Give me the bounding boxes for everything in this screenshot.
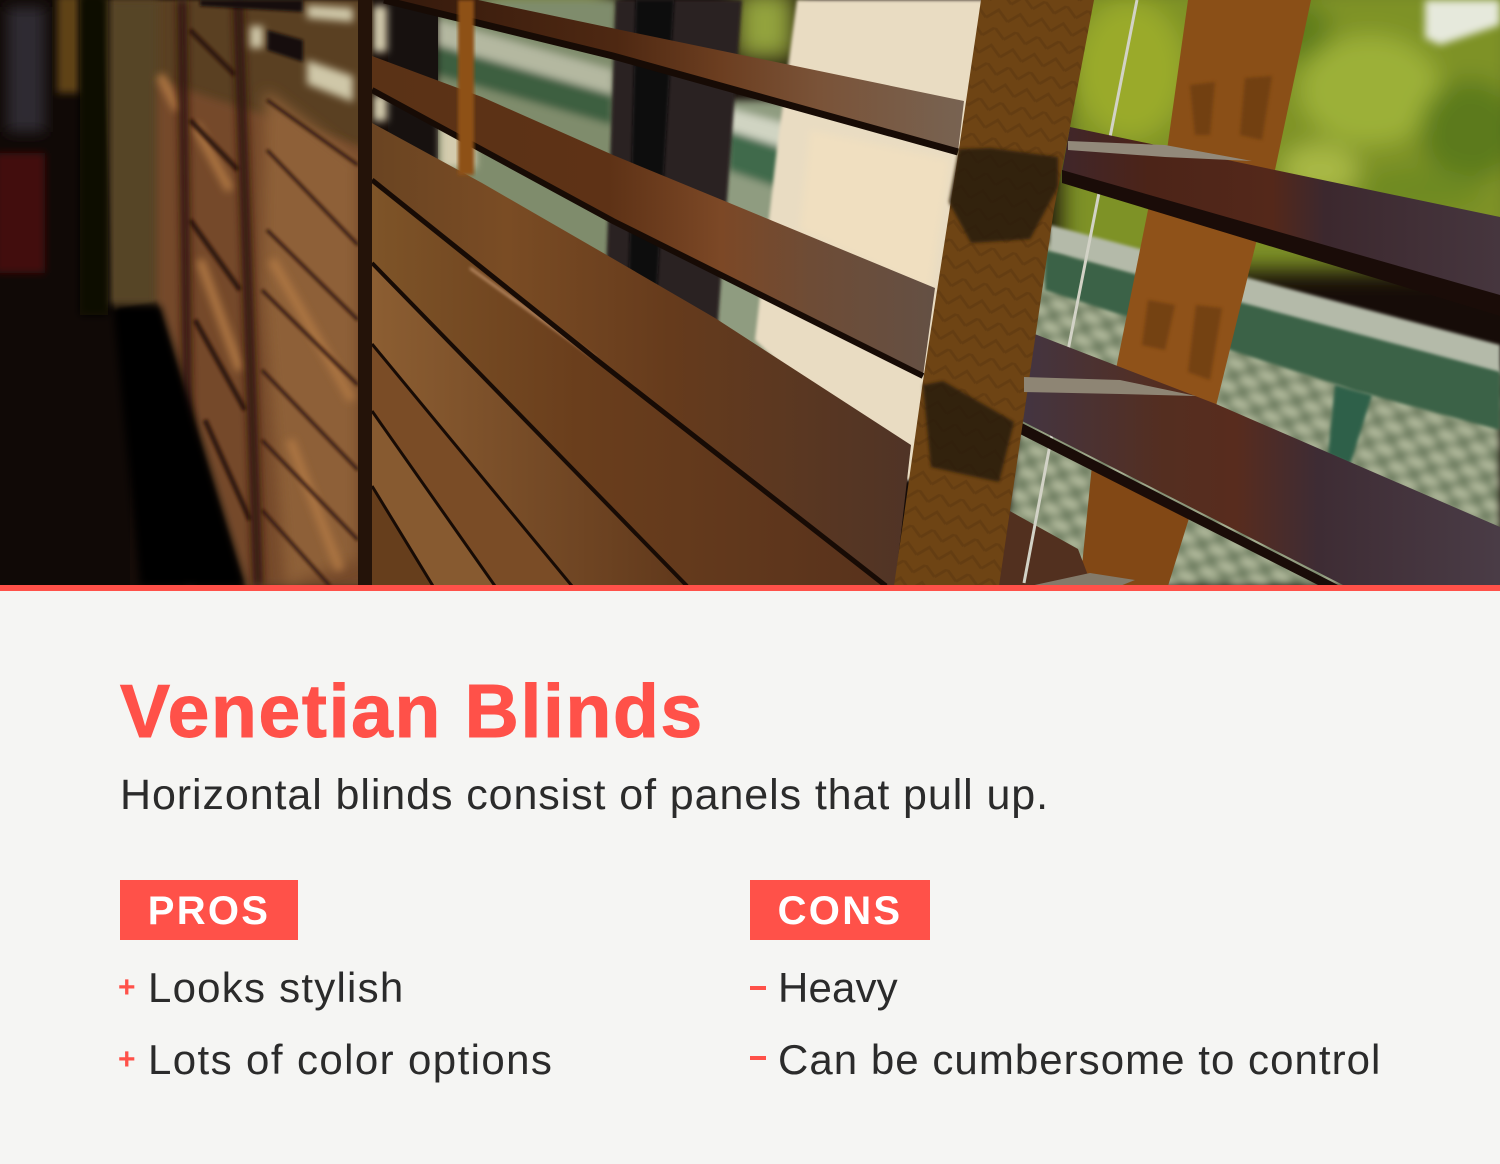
subtitle: Horizontal blinds consist of panels that pull up. (120, 771, 1049, 819)
window frame shadow (628, 0, 674, 320)
cream glimpses at slat ends (373, 6, 476, 168)
back ribbon strap middle (1115, 205, 1258, 406)
slat F (372, 344, 572, 586)
accent divider line under photo (0, 585, 1500, 591)
blurred vertical ladder tapes (182, 0, 258, 586)
right slat two (1020, 333, 1500, 586)
distant orange tape (458, 0, 474, 175)
cons text 2: Can be cumbersome to control (778, 1036, 1381, 1083)
orange slat highlights (160, 75, 352, 570)
lift cord (1024, 0, 1137, 583)
slat B (372, 56, 935, 376)
right slat one (1062, 127, 1500, 297)
photo background (0, 0, 1500, 586)
slat G (372, 411, 495, 586)
cons item 1 (750, 964, 898, 1011)
mesh and rail through the left gaps (437, 0, 790, 370)
front ribbon strap (894, 0, 1094, 586)
foliage outside window (480, 0, 1500, 270)
dim room window (7, 7, 45, 132)
light slat glow (262, 90, 358, 586)
ladder cord lower (1024, 377, 1196, 396)
dark column (80, 0, 108, 315)
balcony rail green (1045, 250, 1500, 430)
blurred room left side (0, 0, 130, 586)
cons badge (750, 880, 930, 940)
dark inner frame (388, 0, 438, 170)
plus mark: + (118, 971, 136, 1004)
minus mark (750, 986, 766, 990)
pros badge (120, 880, 298, 940)
slat gaps (372, 0, 958, 586)
far blurred blinds (100, 0, 372, 586)
mustard post (57, 0, 81, 93)
wall highlight (800, 130, 950, 290)
title: Venetian Blinds (120, 669, 704, 753)
pros badge: PROS (148, 889, 270, 933)
ladder cord bottom (1030, 573, 1135, 586)
red bin (0, 153, 45, 273)
dark slat ends at far top (200, 0, 303, 62)
pros item 2 (118, 1036, 553, 1083)
slat H (372, 486, 433, 586)
slat edge highlight (470, 268, 595, 358)
slat E (372, 264, 687, 586)
photo: wooden venetian blinds (0, 0, 1500, 585)
back strap shadows (1142, 76, 1272, 380)
front strap weave (894, 0, 1094, 586)
pros item 1 (118, 964, 404, 1011)
black wedge (113, 306, 245, 586)
right slat one edge (1062, 170, 1500, 316)
right slat two edge (1018, 421, 1340, 586)
slat C (372, 123, 911, 586)
cream wall (755, 0, 990, 480)
front strap lower dark patch (923, 381, 1014, 482)
sky patch (1425, 0, 1500, 45)
balcony mesh (1000, 240, 1500, 586)
back ribbon strap upper (1167, 0, 1311, 170)
dark window frame (605, 0, 742, 360)
blurred slat shadows (190, 30, 358, 586)
cons badge: CONS (778, 889, 902, 933)
cons item 2 (750, 1036, 1381, 1083)
near vertical ladder bar (358, 0, 372, 586)
ladder cord upper (1068, 141, 1252, 161)
plus mark: + (118, 1043, 136, 1076)
front strap upper dark patch (949, 148, 1058, 243)
pros text 2: Lots of color options (148, 1036, 553, 1083)
slat D (372, 181, 886, 586)
tan far slats (108, 0, 158, 305)
cons text 1: Heavy (778, 964, 898, 1011)
low slat behind strap (985, 505, 1092, 586)
pros text 1: Looks stylish (148, 964, 404, 1011)
blurred cream gaps top left (250, 5, 353, 102)
railing post (1328, 385, 1372, 465)
balcony rail white (1050, 225, 1500, 375)
warm slat glow (157, 80, 372, 586)
minus mark (750, 1056, 766, 1060)
back ribbon strap lower (1080, 465, 1190, 586)
slat A (384, 0, 964, 152)
